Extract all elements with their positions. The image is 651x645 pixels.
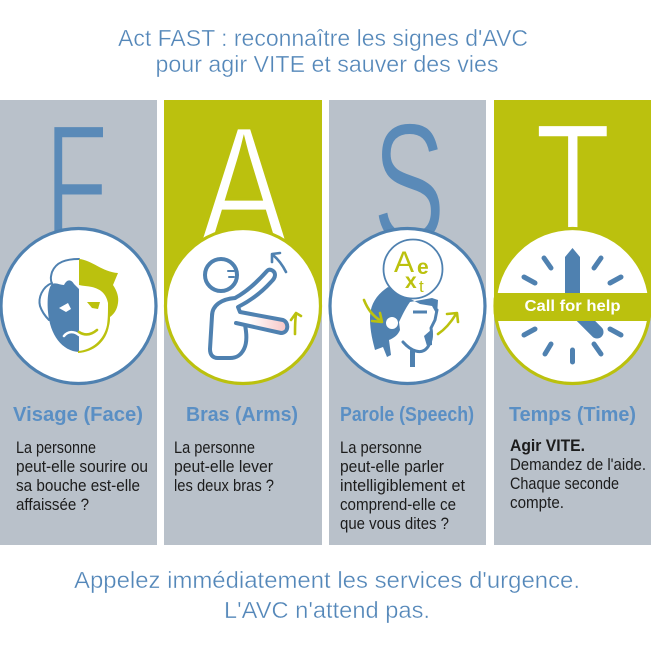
call for help band (493, 293, 651, 321)
letter A: A (199, 90, 289, 283)
body text (174, 438, 274, 495)
letter F: F (45, 90, 108, 282)
body text: peut-elle parler (340, 457, 444, 476)
circle: face icon (1, 228, 156, 384)
body text: que vous dites ? (340, 514, 449, 533)
footer message: Appelez immédiatement les services d'urgence. (74, 567, 580, 593)
heading: Parole (Speech) (340, 404, 474, 426)
heading: Visage (Face) (13, 404, 143, 426)
speech letters: A (394, 246, 414, 279)
panel: T temps (493, 87, 651, 545)
body text: La personne (16, 438, 96, 457)
circle: speech icon (330, 228, 485, 384)
title (118, 25, 528, 77)
body text: affaissée ? (16, 495, 89, 514)
panel: A bras (164, 90, 322, 545)
circle: arm icon (166, 228, 320, 384)
footer message: L'AVC n'attend pas. (224, 597, 430, 623)
body text: comprend-elle ce (340, 495, 456, 514)
body text: peut-elle lever (174, 457, 273, 476)
speech letters: x (405, 270, 417, 293)
body text: sa bouche est-elle (16, 476, 140, 495)
panel: F visage (0, 90, 157, 545)
title: pour agir VITE et sauver des vies (156, 51, 498, 77)
call for help band: Call for help (524, 298, 621, 315)
body text: Agir VITE. (510, 436, 585, 455)
body text: compte. (510, 493, 564, 512)
title: Act FAST : reconnaître les signes d'AVC (118, 25, 528, 51)
body text: les deux bras ? (174, 476, 274, 495)
footer message (74, 567, 580, 623)
body text (510, 436, 646, 512)
letter S: S (373, 89, 445, 280)
heading: Temps (Time) (509, 404, 636, 426)
body text (340, 438, 465, 533)
body text: Chaque seconde (510, 474, 619, 493)
body text (16, 438, 148, 514)
body text: La personne (174, 438, 255, 457)
letter T: T (535, 87, 611, 280)
panel: S parole (329, 89, 486, 545)
body text: La personne (340, 438, 422, 457)
speech letters: e (417, 256, 429, 279)
circle: clock icon (493, 228, 651, 384)
speech letters: t (419, 277, 424, 296)
speech letters (394, 246, 429, 296)
body text: intelligiblement et (340, 476, 465, 495)
heading: Bras (Arms) (186, 404, 298, 426)
body text: peut-elle sourire ou (16, 457, 148, 476)
